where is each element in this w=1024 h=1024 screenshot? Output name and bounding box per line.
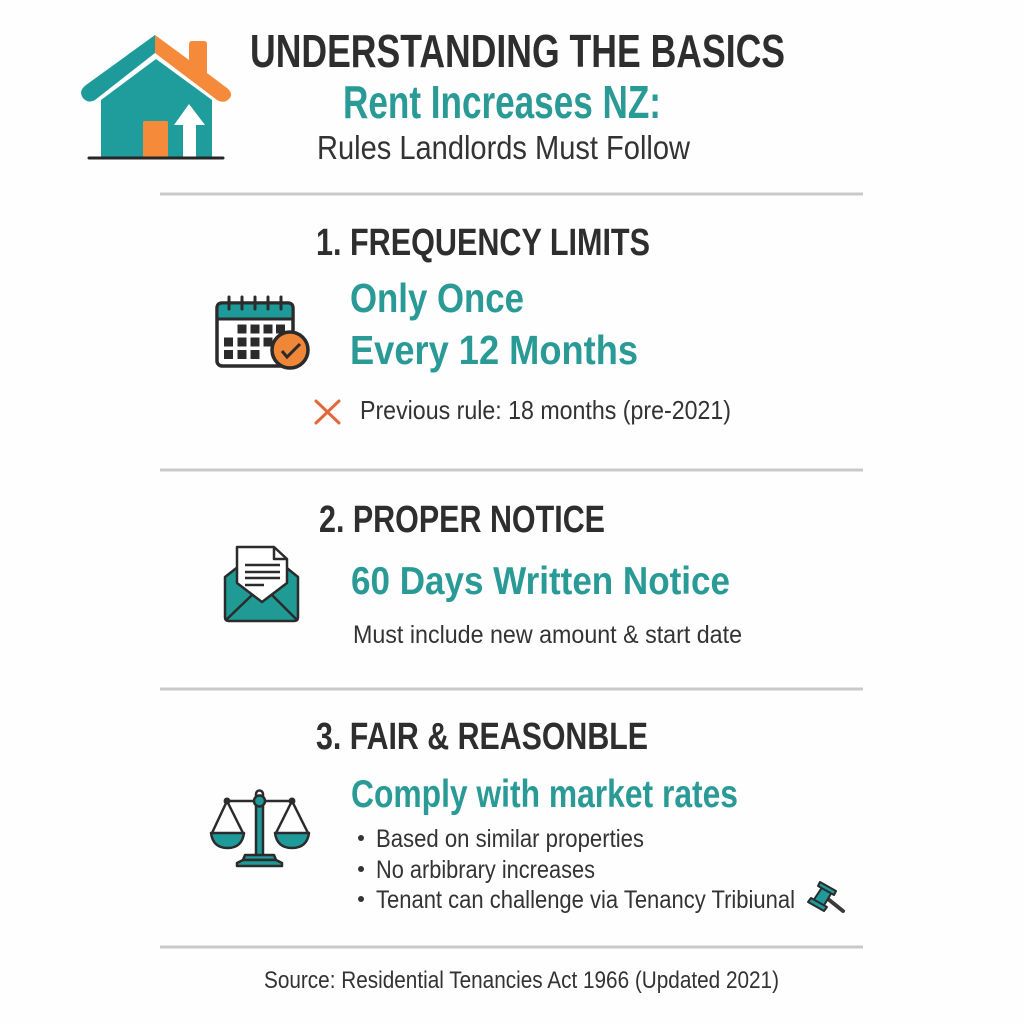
subtitle: rent increases: Rent Increases NZ: bbox=[343, 76, 661, 128]
panel: fair and reasonable bbox=[211, 716, 843, 914]
bullet list bbox=[358, 825, 795, 914]
heading: fair and reasonble: 3. FAIR & REASONBLE bbox=[316, 716, 648, 758]
icon: calendar with check bbox=[217, 297, 308, 368]
heading: proper notice: 2. PROPER NOTICE bbox=[319, 499, 605, 541]
highlight: 60 days written notice: 60 Days Written Notice bbox=[351, 560, 730, 603]
bullet list: Based on similar properties bbox=[376, 825, 644, 853]
highlight: every 12 months: Every 12 Months bbox=[350, 327, 638, 373]
source line: Source: Residential Tenancies Act 1966 (Updated 2021) bbox=[264, 967, 779, 994]
title block bbox=[250, 25, 785, 166]
highlight: comply with market rates: Comply with market rates bbox=[351, 773, 738, 816]
panel: frequency limits bbox=[217, 222, 731, 425]
subtitle: rules: Rules Landlords Must Follow bbox=[317, 129, 690, 166]
bullet list: No arbibrary increases bbox=[376, 856, 595, 884]
heading: frequency limits: 1. FREQUENCY LIMITS bbox=[316, 222, 650, 264]
title: understanding the basics: UNDERSTANDING THE BASICS bbox=[250, 25, 785, 77]
icon: envelope with letter bbox=[225, 547, 298, 621]
bullet list: Tenant can challenge via Tenancy Tribiunal bbox=[376, 886, 795, 914]
highlight: only once: Only Once bbox=[350, 275, 524, 321]
icon: balance scales bbox=[211, 790, 309, 866]
icon: house with rising arrow bbox=[81, 35, 231, 158]
panel: proper notice bbox=[225, 499, 742, 649]
note: notice contents: Must include new amount & start date bbox=[353, 621, 742, 649]
note: previous rule: Previous rule: 18 months (pre-2021) bbox=[360, 395, 731, 425]
icon: gavel bbox=[808, 882, 843, 911]
icon: orange cross bbox=[316, 401, 339, 423]
